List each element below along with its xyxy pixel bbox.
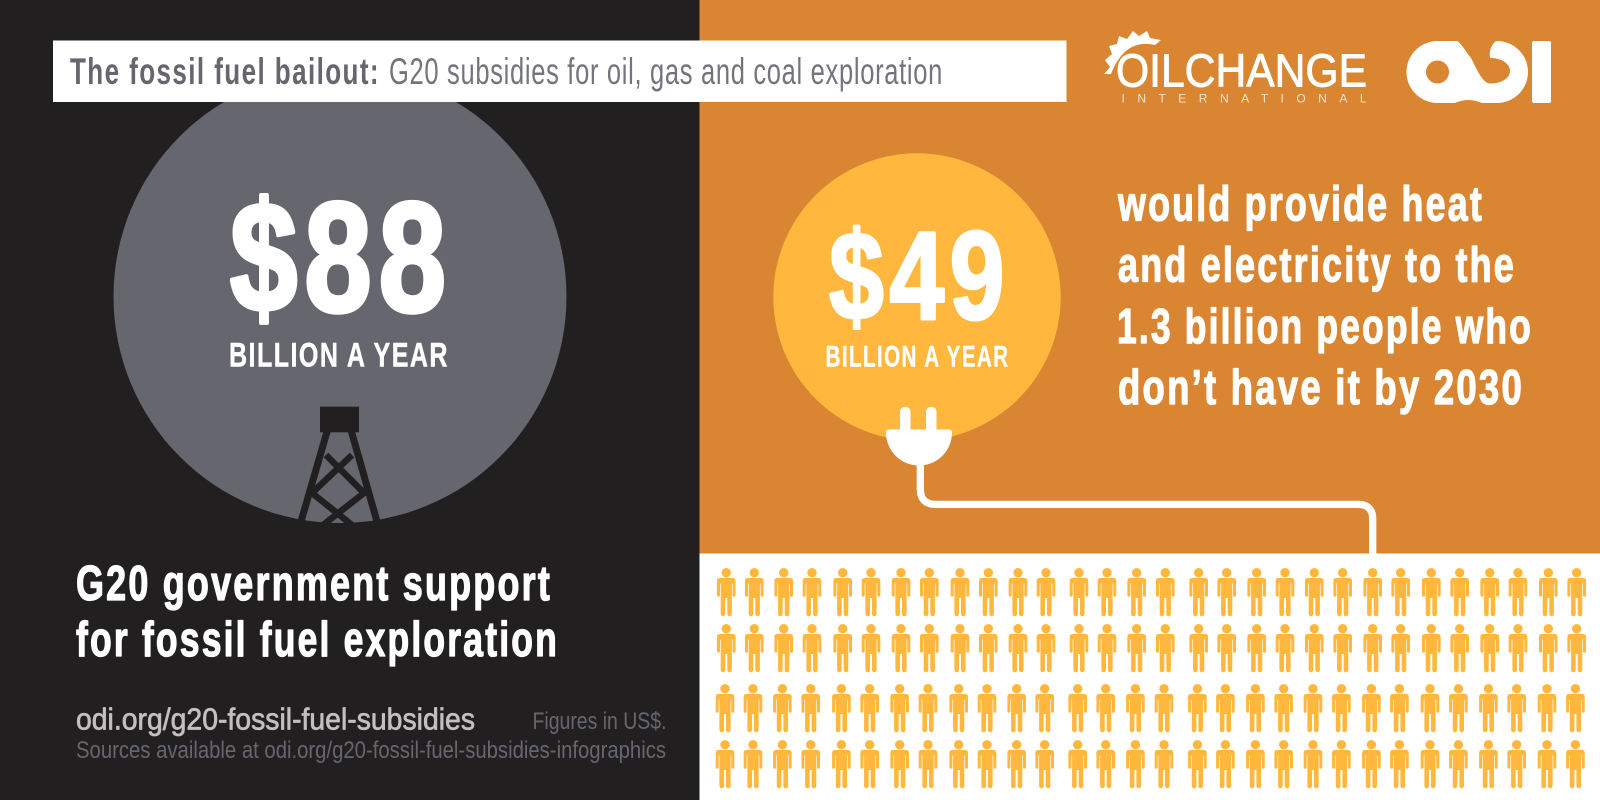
logo: ODI (1406, 40, 1551, 104)
caption: billion a year: BILLION A YEAR (826, 340, 1010, 374)
text block: G20 government support: for fossil fuel exploration (76, 613, 559, 667)
text block: G20 government support: G20 government support (76, 557, 552, 611)
text block: G20 government support (76, 557, 559, 667)
panel: dark left background (0, 0, 700, 800)
big number: $88: $88 (230, 171, 453, 345)
panel: energy access circle (773, 153, 1061, 441)
people grid: 1.3 billion people without energy access (716, 568, 1586, 788)
big number: $49: $49 (829, 207, 1010, 346)
caption: billion a year: BILLION A YEAR (229, 336, 449, 374)
logo: Oil Change International: INTERNATIONAL (1122, 92, 1367, 106)
title bar (53, 40, 1066, 102)
logo: Oil Change International: OILCHANGE (1116, 45, 1367, 97)
icon: plug and cord (886, 407, 1373, 556)
text block: would provide heat (1117, 178, 1533, 415)
icon: oil derrick (300, 407, 378, 525)
panel: white lower right background (700, 554, 1600, 800)
link: odi.org url: odi.org/g20-fossil-fuel-subsidies (76, 702, 475, 736)
subheading: G20 subsidies for oil, gas and coal exploration (389, 51, 943, 92)
note: sources: Sources available at odi.org/g20-fossil-fuel-subsidies-infographics (76, 737, 666, 764)
heading: bold title: The fossil fuel bailout: (70, 51, 380, 92)
panel: fossil fuel subsidies circle (114, 70, 566, 525)
panel: orange upper right background (700, 0, 1600, 554)
note: figures in US$: Figures in US$. (532, 708, 666, 735)
logo: Oil Change International (1104, 31, 1367, 106)
